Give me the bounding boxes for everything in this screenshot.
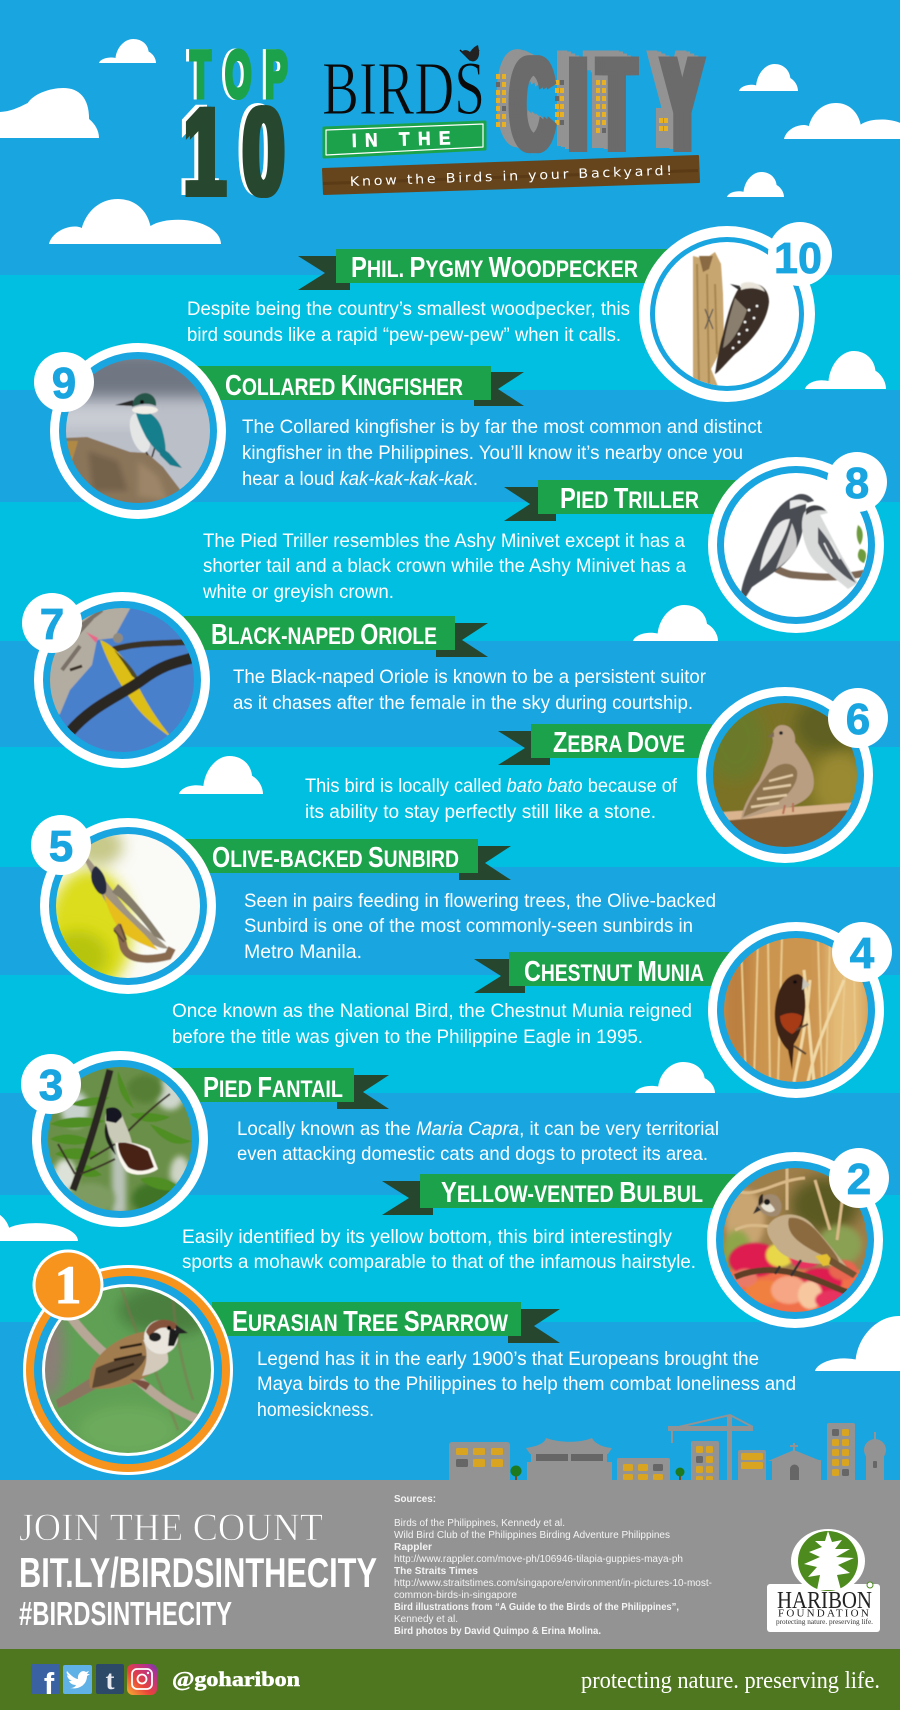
ribbon bbox=[172, 1068, 389, 1109]
sources: Wild Bird Club of the Philippines Birding Adventure Philippines bbox=[394, 1530, 670, 1541]
ribbon: ZEBRA DOVE bbox=[553, 727, 685, 759]
photo circle bbox=[50, 343, 226, 519]
description: sports a mohawk comparable to that of the infamous hairstyle. bbox=[182, 1251, 696, 1273]
ribbon bbox=[195, 366, 524, 406]
description: The Black-naped Oriole is known to be a persistent suitor bbox=[233, 666, 706, 688]
green footer bar bbox=[0, 1649, 900, 1710]
description: before the title was given to the Philippine Eagle in 1995. bbox=[172, 1026, 643, 1048]
sources: Sources: bbox=[394, 1494, 436, 1505]
number badge bbox=[827, 452, 887, 512]
description: hear a loud kak-kak-kak-kak. bbox=[242, 468, 478, 490]
ribbon bbox=[382, 1174, 735, 1215]
number badge bbox=[32, 1250, 104, 1320]
ribbon: BLACK-NAPED ORIOLE bbox=[211, 619, 437, 651]
ribbon bbox=[498, 724, 712, 765]
description: Despite being the country’s smallest woodpecker, this bbox=[187, 298, 630, 320]
title: Top 10: 10 bbox=[186, 82, 287, 222]
Haribon logo: HARIBON bbox=[777, 1588, 872, 1614]
description: kingfisher in the Philippines. You’ll know it’s nearby once you bbox=[242, 442, 743, 464]
icon: twitter bbox=[63, 1665, 92, 1694]
sources: Birds of the Philippines, Kennedy et al. bbox=[394, 1518, 565, 1529]
number badge: 9 bbox=[52, 359, 76, 408]
title: Top 10: TOP bbox=[190, 38, 288, 112]
description bbox=[305, 775, 678, 823]
icon: tumblr bbox=[96, 1664, 124, 1695]
Haribon logo: FOUNDATION bbox=[778, 1608, 871, 1620]
ribbon bbox=[298, 249, 676, 290]
ribbon bbox=[184, 839, 511, 880]
number badge: 5 bbox=[49, 822, 73, 871]
sources: Bird illustrations from “A Guide to the Birds of the Philippines”, bbox=[394, 1602, 679, 1613]
sources: The Straits Times bbox=[394, 1566, 478, 1577]
join the count: BIT.LY/BIRDSINTHECITY bbox=[19, 1549, 377, 1596]
panel: 7 Black-naped Oriole bbox=[22, 592, 706, 768]
description: shorter tail and a black crown while the Ashy Minivet has a bbox=[203, 555, 686, 577]
background bands bbox=[0, 275, 900, 1322]
ribbon bbox=[504, 480, 735, 521]
number badge bbox=[829, 1148, 889, 1208]
description bbox=[172, 1000, 692, 1048]
sources: Rappler bbox=[394, 1542, 432, 1553]
title block bbox=[178, 24, 706, 222]
description: even attacking domestic cats and dogs to protect its area. bbox=[237, 1143, 708, 1165]
ribbon: COLLARED KINGFISHER bbox=[225, 370, 463, 402]
photo circle bbox=[707, 1152, 883, 1328]
ribbon: PIED TRILLER bbox=[560, 483, 699, 515]
description: Seen in pairs feeding in flowering trees, the Olive-backed bbox=[244, 890, 716, 912]
sources bbox=[394, 1494, 712, 1637]
description: its ability to stay perfectly still like a stone. bbox=[305, 801, 656, 823]
photo circle bbox=[639, 226, 815, 402]
tagline: protecting nature. preserving life. bbox=[581, 1668, 880, 1694]
description: Once known as the National Bird, the Chestnut Munia reigned bbox=[172, 1000, 692, 1022]
number badge: 1 bbox=[54, 1255, 82, 1315]
description bbox=[233, 666, 706, 714]
title: Top 10 bbox=[178, 38, 288, 222]
number badge: 7 bbox=[40, 600, 64, 649]
panel: 8 Pied Triller bbox=[202, 452, 887, 633]
title: City: CITY bbox=[503, 27, 694, 175]
clouds bbox=[0, 39, 900, 1371]
title: in the sign: IN THE bbox=[352, 128, 459, 152]
description bbox=[202, 530, 686, 603]
ribbon bbox=[474, 952, 729, 993]
footer panel bbox=[0, 1480, 900, 1649]
ribbon: CHESTNUT MUNIA bbox=[524, 956, 704, 988]
photo circle bbox=[697, 687, 873, 863]
number badge bbox=[34, 352, 94, 412]
ribbon: PHIL. PYGMY WOODPECKER bbox=[351, 252, 638, 284]
ribbon: YELLOW-VENTED BULBUL bbox=[441, 1177, 703, 1209]
description: as it chases after the female in the sky during courtship. bbox=[233, 692, 693, 714]
number badge: 4 bbox=[850, 929, 875, 978]
description bbox=[182, 1226, 696, 1273]
ribbon bbox=[212, 1302, 560, 1343]
description: homesickness. bbox=[257, 1399, 374, 1421]
panel: 4 Chestnut Munia bbox=[172, 922, 892, 1098]
panel: 2 Yellow-vented Bulbul bbox=[182, 1148, 889, 1328]
description bbox=[187, 298, 630, 346]
city skyline bbox=[449, 1415, 886, 1482]
join the count bbox=[19, 1506, 377, 1632]
number badge: 2 bbox=[847, 1155, 871, 1204]
description: white or greyish crown. bbox=[202, 581, 394, 603]
panel: 9 Collared Kingfisher bbox=[34, 343, 763, 519]
sources: http://www.straitstimes.com/singapore/environment/in-pictures-10-most- bbox=[394, 1578, 712, 1589]
building windows bbox=[496, 74, 668, 133]
description: Maya birds to the Philippines to help them combat loneliness and bbox=[257, 1373, 796, 1395]
title: City: CITY bbox=[499, 25, 690, 173]
sources: common-birds-in-singapore bbox=[394, 1590, 517, 1601]
title: in the sign bbox=[324, 122, 485, 157]
photo circle bbox=[34, 592, 210, 768]
description: Metro Manila. bbox=[244, 941, 362, 963]
description bbox=[257, 1348, 796, 1421]
join the count: #BIRDSINTHECITY bbox=[19, 1595, 232, 1632]
icon: instagram bbox=[127, 1664, 157, 1695]
title: Top 10: 10 bbox=[182, 82, 283, 222]
number badge: 10 bbox=[774, 234, 822, 283]
title: wooden plank tagline: Know the Birds in your Backyard! bbox=[350, 164, 675, 190]
title: City: CITY bbox=[515, 30, 706, 178]
description bbox=[242, 416, 763, 490]
ribbon bbox=[184, 616, 488, 657]
photo circle bbox=[23, 1265, 233, 1475]
title: City: CITY bbox=[507, 29, 698, 177]
social handle: @goharibon bbox=[172, 1667, 300, 1691]
sources: Kennedy et al. bbox=[394, 1614, 458, 1625]
number badge: 8 bbox=[845, 459, 869, 508]
description: Legend has it in the early 1900’s that Europeans brought the bbox=[257, 1348, 759, 1370]
panel: 6 Zebra Dove bbox=[305, 687, 888, 863]
sources: http://www.rappler.com/move-ph/106946-tilapia-guppies-maya-ph bbox=[394, 1554, 683, 1565]
icon: facebook bbox=[31, 1664, 60, 1701]
title: City: CITY bbox=[495, 24, 686, 172]
ribbon: PIED FANTAIL bbox=[203, 1072, 343, 1104]
photo circle bbox=[32, 1051, 208, 1227]
number badge bbox=[832, 922, 892, 982]
description bbox=[237, 1118, 719, 1165]
Haribon logo bbox=[767, 1529, 880, 1632]
number badge bbox=[22, 593, 82, 653]
icon: tumblr: t bbox=[106, 1665, 114, 1695]
Haribon logo: protecting nature. preserving life. bbox=[776, 1617, 873, 1626]
title: Birds: BIRDS bbox=[322, 47, 485, 131]
photo circle bbox=[708, 922, 884, 1098]
photo circle bbox=[708, 457, 884, 633]
sources: Bird photos by David Quimpo & Erina Molina. bbox=[394, 1626, 601, 1637]
title: Top 10: 10 bbox=[178, 80, 279, 220]
description: The Pied Triller resembles the Ashy Minivet except it has a bbox=[203, 530, 685, 552]
number badge bbox=[21, 1054, 81, 1114]
ribbon: EURASIAN TREE SPARROW bbox=[232, 1306, 508, 1338]
title: City: CITY bbox=[511, 30, 702, 178]
panel: 5 Olive-backed Sunbird bbox=[31, 815, 716, 994]
number badge bbox=[31, 815, 91, 875]
description: Easily identified by its yellow bottom, this bird interestingly bbox=[182, 1226, 672, 1248]
panel: 10 Phil. Pygmy Woodpecker bbox=[187, 222, 832, 402]
title: wooden plank tagline bbox=[323, 156, 699, 194]
description: This bird is locally called bato bato because of bbox=[305, 775, 678, 797]
description: The Collared kingfisher is by far the most common and distinct bbox=[242, 416, 763, 438]
panel: 3 Pied Fantail bbox=[21, 1051, 719, 1227]
icon: facebook: f bbox=[44, 1666, 55, 1701]
description: Locally known as the Maria Capra, it can be very territorial bbox=[237, 1118, 719, 1140]
number badge: 3 bbox=[39, 1061, 63, 1110]
panel: 1 Eurasian Tree Sparrow bbox=[23, 1250, 796, 1475]
title: Top 10: TOP bbox=[187, 38, 285, 112]
title: City: CITY bbox=[511, 30, 702, 178]
join the count: JOIN THE COUNT bbox=[19, 1506, 323, 1549]
number badge: 6 bbox=[846, 695, 870, 744]
number badge bbox=[828, 688, 888, 748]
ribbon: OLIVE-BACKED SUNBIRD bbox=[212, 842, 459, 874]
photo circle bbox=[40, 818, 216, 994]
title: City: CITY bbox=[507, 30, 698, 178]
number badge bbox=[768, 222, 832, 286]
description bbox=[244, 890, 716, 963]
description: bird sounds like a rapid “pew-pew-pew” when it calls. bbox=[187, 324, 621, 346]
description: Sunbird is one of the most commonly-seen sunbirds in bbox=[244, 915, 693, 937]
